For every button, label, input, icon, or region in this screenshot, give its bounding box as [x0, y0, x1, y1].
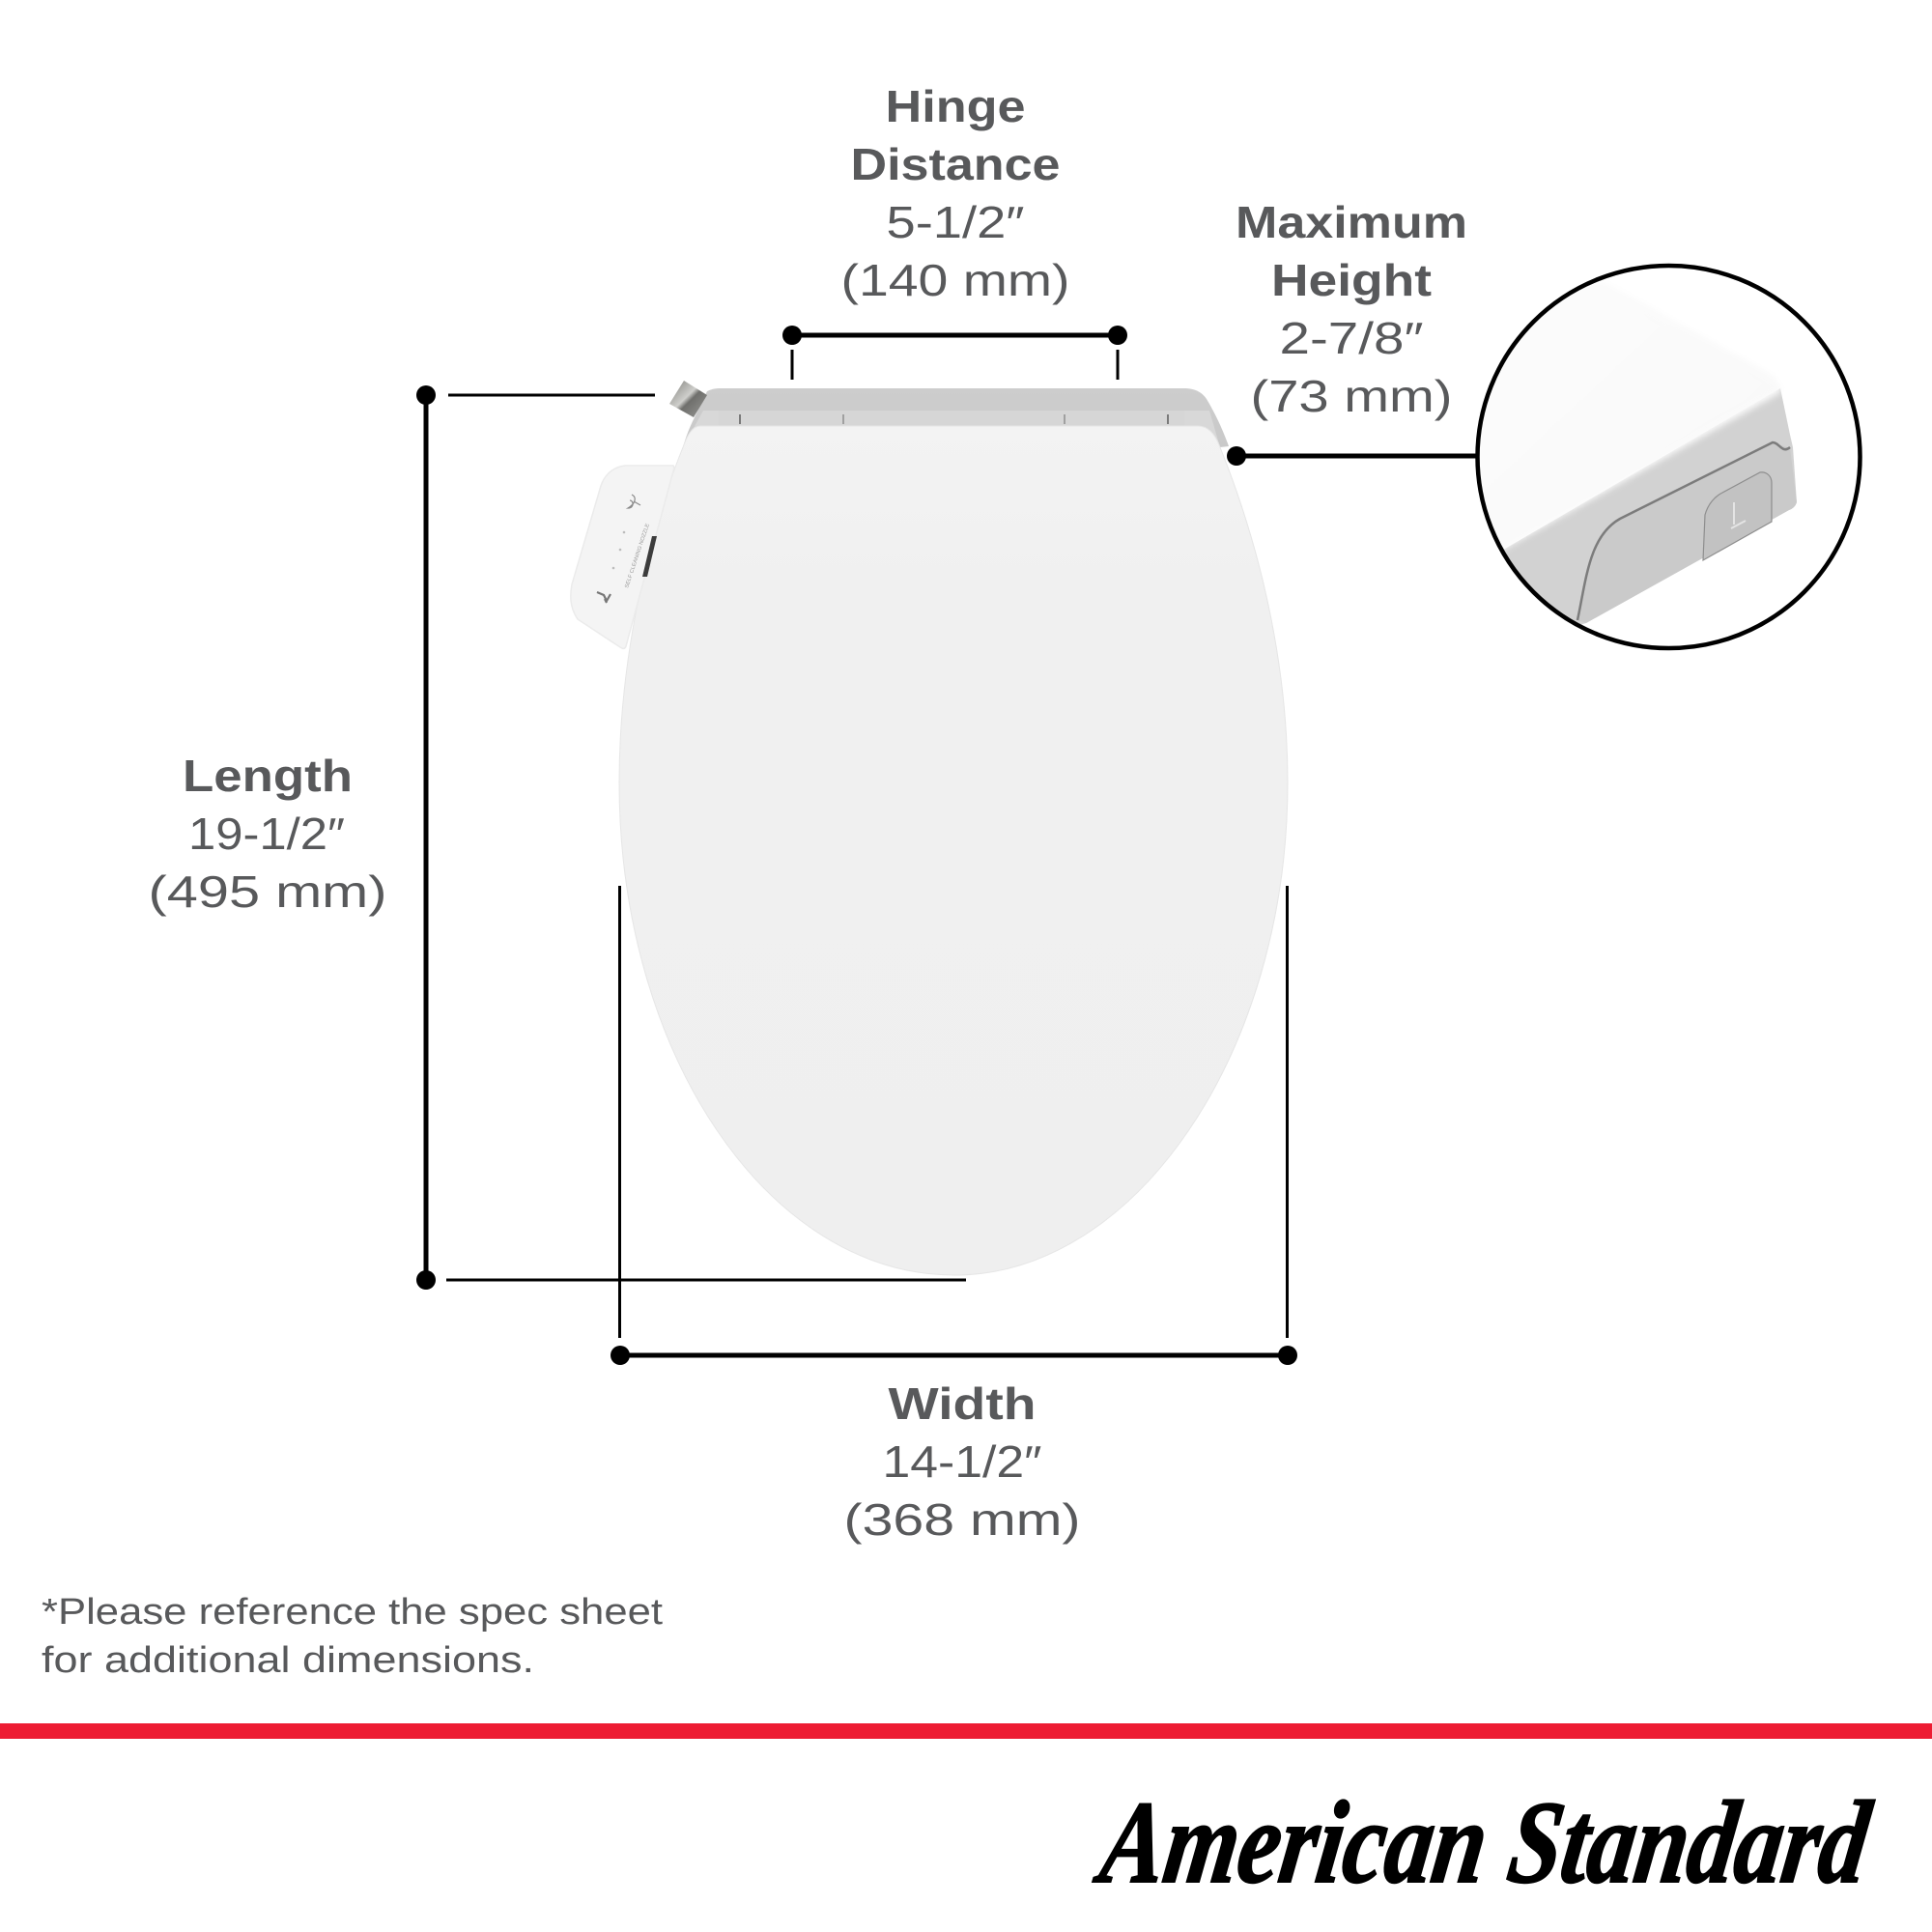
label: hinge distance: (140 mm) [840, 255, 1070, 305]
footnote: *Please reference the spec sheet [42, 1592, 664, 1633]
red divider bar [0, 1723, 1932, 1739]
footnote: for additional dimensions. [42, 1640, 534, 1681]
label: maximum height [1236, 197, 1467, 421]
dimension: maximum height leader [1227, 446, 1478, 466]
label: length: (495 mm) [149, 867, 386, 917]
label: length: 19-1/2″ [188, 809, 345, 859]
dimension: width [611, 886, 1297, 1365]
label: hinge distance [840, 81, 1070, 305]
label: width: Width [889, 1378, 1036, 1429]
label: hinge distance: Distance [850, 139, 1061, 189]
label: width [844, 1378, 1080, 1545]
label: hinge distance: Hinge [885, 81, 1026, 131]
icon: rear wash [628, 495, 640, 508]
water inlet knob [669, 381, 707, 417]
inset seam line [1577, 442, 1790, 620]
footnote [42, 1592, 664, 1681]
label: maximum height: 2-7/8″ [1279, 313, 1424, 363]
label: maximum height: Maximum [1236, 197, 1467, 247]
label: maximum height: Height [1271, 255, 1432, 305]
inset side body [1504, 388, 1797, 624]
label: hinge distance: 5-1/2″ [887, 197, 1024, 247]
control clip [642, 536, 657, 577]
control dots [612, 531, 625, 569]
label: length [149, 751, 386, 917]
hinge strip [683, 411, 1220, 447]
inset base section [1586, 500, 1797, 623]
product: bidet seat top view [571, 381, 1288, 1275]
label: length: Length [183, 751, 353, 801]
inset: seat height detail [1430, 261, 1861, 648]
dimension: length [416, 385, 966, 1290]
dimension: hinge distance [782, 326, 1127, 380]
inset top surface [1504, 388, 1781, 552]
icon: front wash [597, 592, 611, 603]
label: maximum height: (73 mm) [1250, 371, 1453, 421]
panel printed label: SELF CLEANING NOZZLE [624, 523, 651, 589]
label: width: 14-1/2″ [883, 1436, 1041, 1487]
inset access door [1703, 472, 1772, 560]
side control panel [571, 466, 674, 648]
label: width: (368 mm) [844, 1494, 1080, 1545]
seat lid [619, 426, 1288, 1275]
seat hinge band [683, 388, 1229, 447]
